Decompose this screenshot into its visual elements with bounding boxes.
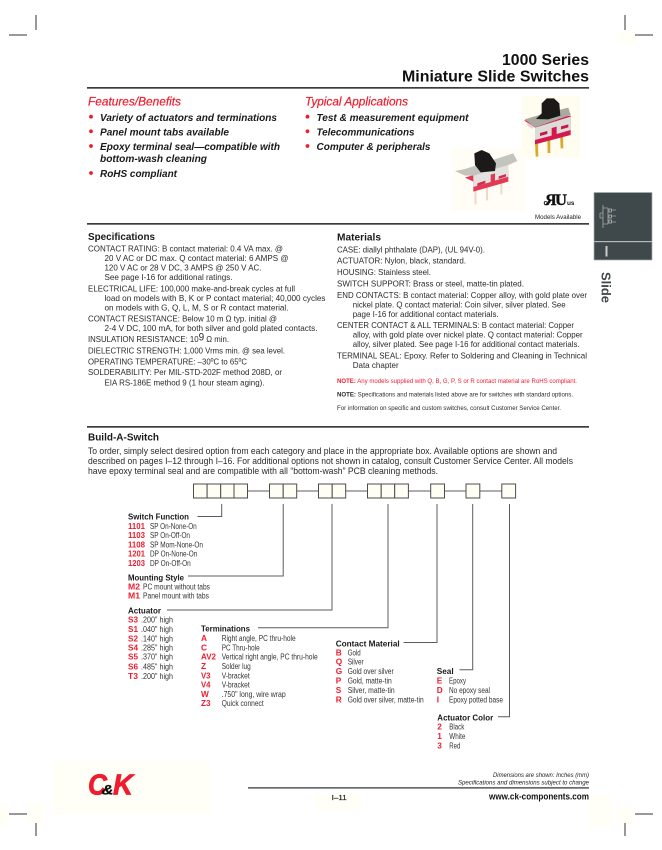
option list: terminations: Quick connect: [222, 699, 264, 708]
option list: seal: No epoxy seal: [449, 686, 490, 695]
option list: actuator: S5: [128, 652, 138, 662]
option list: actuator: S6: [128, 661, 138, 671]
option list: mounting style: Panel mount with tabs: [143, 592, 209, 601]
option list: actuator: .040" high: [141, 625, 173, 634]
heading: build-a-switch: Build-A-Switch: [88, 432, 159, 444]
footer note: dimensions: Dimensions are shown: Inches (mm): [493, 772, 589, 779]
specifications text: CONTACT RESISTANCE: Below 10 m Ω typ. initial @: [88, 313, 277, 323]
option list: actuator: Actuator: [128, 606, 162, 616]
specifications text: OPERATING TEMPERATURE: –30ºC to 65ºC: [88, 357, 247, 367]
option list: terminations: AV2: [201, 651, 216, 661]
specifications text: SOLDERABILITY: Per MIL-STD-202F method 208D, or: [88, 367, 282, 377]
specifications text: 2-4 V DC, 100 mA, for both silver and gold plated contacts.: [104, 323, 318, 333]
logo: C&K: K: [113, 770, 135, 802]
option list: actuator color: Black: [449, 722, 465, 731]
option list: actuator: T3: [128, 671, 138, 681]
option list: switch function: DP On-Off-On: [150, 559, 191, 568]
title: Miniature Slide Switches: [402, 68, 589, 86]
option list: terminations: Z: [201, 661, 206, 671]
option list: actuator: .285" high: [141, 643, 173, 652]
option list: terminations: W: [201, 689, 209, 699]
website: www.ck-components.com: [488, 792, 589, 802]
option list: terminations: V-bracket: [222, 681, 250, 690]
option list: mounting style: M2: [128, 581, 140, 591]
features list: [89, 112, 280, 180]
specifications text: [88, 244, 326, 388]
notes: [337, 378, 577, 412]
option list: actuator color: Actuator Color: [437, 712, 494, 722]
icon: UL recognized mark: c: [544, 200, 548, 207]
option list: switch function: DP On-None-On: [150, 550, 197, 559]
option list: switch function: SP Mom-None-On: [150, 540, 203, 549]
side tab: [594, 192, 652, 260]
option list: terminations: A: [201, 633, 207, 643]
photo: upright slide switch: [522, 96, 580, 158]
option list: terminations: Vertical right angle, PC thru-hole: [222, 652, 318, 661]
models available caption: Models Available: [535, 214, 581, 221]
option list: contact material: B: [336, 647, 342, 657]
materials text: alloy, silver plated. See page I-16 for additional contact materials.: [353, 339, 580, 349]
applications list: Computer & peripherals: [316, 141, 431, 153]
logo: C&K: &: [102, 782, 114, 798]
icon: UL recognized mark: us: [567, 200, 575, 207]
option list: seal: Seal: [437, 666, 454, 676]
page number: I–11: [332, 793, 347, 802]
icon: switch schematic: [600, 205, 616, 228]
applications list: Test & measurement equipment: [316, 112, 469, 124]
option list: actuator: S2: [128, 633, 138, 643]
option list: actuator: [128, 606, 173, 681]
option list: terminations: C: [201, 642, 207, 652]
materials text: HOUSING: Stainless steel.: [337, 267, 431, 277]
materials text: nickel plate. Q contact material: Coin silver, silver plated. See: [353, 300, 566, 310]
panel: typical applications: [305, 96, 469, 153]
option list: contact material: P: [336, 676, 342, 686]
option list: switch function: Switch Function: [128, 512, 189, 522]
applications list: Telecommunications: [316, 126, 415, 138]
heading: materials: Materials: [337, 232, 381, 244]
heading: features: Features/Benefits: [88, 96, 181, 108]
heading: applications: Typical Applications: [305, 96, 408, 108]
option list: contact material: Contact Material: [336, 638, 400, 648]
materials text: alloy, with gold plate over nickel plate. Q contact material: Copper: [353, 330, 583, 340]
option list: actuator color: [437, 712, 494, 751]
materials text: TERMINAL SEAL: Epoxy. Refer to Soldering and Cleaning in Technical: [337, 350, 587, 360]
section letter I: [606, 246, 608, 256]
photo: panel mount slide switch: [453, 148, 525, 211]
option list: contact material: Gold over silver: [348, 667, 394, 676]
applications list: [306, 112, 469, 153]
materials text: ACTUATOR: Nylon, black, standard.: [337, 256, 466, 266]
footer: [248, 772, 589, 802]
option list: mounting style: Mounting Style: [128, 572, 184, 582]
option list: switch function: 1203: [128, 558, 145, 568]
option list: terminations: PC Thru-hole: [222, 643, 260, 652]
footer note: dimensions: [458, 772, 589, 786]
option list: contact material: Silver: [348, 658, 364, 667]
intro paragraph: described on pages I–12 through I–16. For additional options not shown in catalog, consult Customer Service Center. All models: [88, 455, 573, 466]
option list: seal: D: [437, 685, 443, 695]
option list: terminations: Solder lug: [222, 662, 251, 671]
title: 1000 Series: [502, 52, 589, 69]
option list: switch function: 1103: [128, 530, 145, 540]
option list: contact material: G: [336, 666, 342, 676]
option list: mounting style: PC mount without tabs: [143, 582, 210, 591]
option boxes: [194, 484, 516, 498]
option list: actuator color: White: [449, 732, 466, 741]
connector lines: [167, 504, 510, 717]
option list: contact material: Gold over silver, matte-tin: [348, 695, 424, 704]
materials text: SWITCH SUPPORT: Brass or steel, matte-tin plated.: [337, 278, 524, 288]
panel: build-a-switch: [88, 432, 573, 751]
option list: terminations: V-bracket: [222, 671, 250, 680]
option list: actuator: .485" high: [141, 662, 173, 671]
option list: actuator color: 3: [437, 741, 442, 751]
option list: seal: Epoxy: [449, 677, 466, 686]
notes: NOTE: Any models supplied with Q, B, G, P, S or R contact material are RoHS compliant.: [337, 378, 577, 385]
features list: RoHS compliant: [100, 168, 177, 180]
panel: materials: [337, 232, 587, 412]
specifications text: load on models with B, K or P contact material; 40,000 cycles: [104, 293, 326, 303]
specifications text: 20 V AC or DC max. Q contact material: 6 AMPS @: [104, 253, 288, 263]
option list: contact material: Q: [336, 657, 343, 667]
panel: features and benefits: [88, 96, 280, 180]
option list: actuator: .370" high: [141, 653, 173, 662]
intro paragraph: have epoxy terminal seal and are compatible with all “bottom-wash” PCB cleaning methods.: [88, 465, 438, 476]
features list: bottom-wash cleaning: [100, 153, 208, 165]
option list: actuator color: Red: [449, 742, 460, 751]
features list: Epoxy terminal seal—compatible with: [100, 141, 280, 153]
option list: actuator: .140" high: [141, 634, 173, 643]
option list: terminations: [201, 624, 318, 708]
option list: actuator color: 2: [437, 721, 442, 731]
specifications text: CONTACT RATING: B contact material: 0.4 VA max. @: [88, 244, 283, 254]
specifications text: EIA RS-186E method 9 (1 hour steam aging).: [104, 378, 264, 388]
specifications text: on models with G, Q, L, M, S or R contact material.: [104, 302, 288, 312]
specifications text: See page I-16 for additional ratings.: [104, 272, 232, 282]
option list: switch function: [128, 512, 203, 568]
option list: switch function: 1108: [128, 539, 145, 549]
option list: actuator: S4: [128, 642, 138, 652]
option list: actuator: .200" high: [141, 616, 173, 625]
option list: seal: Epoxy potted base: [449, 695, 503, 704]
logo: C&K: [88, 770, 135, 802]
option list: seal: I: [437, 694, 439, 704]
icon: UL recognized mark: R: [545, 192, 556, 209]
materials text: Data chapter: [353, 360, 399, 370]
materials text: CENTER CONTACT & ALL TERMINALS: B contact material: Copper: [337, 320, 574, 330]
option list: mounting style: M1: [128, 591, 140, 601]
option list: contact material: [336, 638, 424, 704]
option list: terminations: Terminations: [201, 624, 250, 634]
option list: terminations: Right angle, PC thru-hole: [222, 634, 296, 643]
specifications text: ELECTRICAL LIFE: 100,000 make-and-break cycles at full: [88, 284, 295, 294]
option list: contact material: Gold: [348, 648, 361, 657]
option list: contact material: R: [336, 694, 342, 704]
footer note: dimensions: Specifications and dimensions subject to change: [458, 780, 589, 786]
option list: actuator: S3: [128, 615, 138, 625]
intro paragraph: [88, 445, 573, 476]
option list: terminations: V4: [201, 680, 211, 690]
option list: terminations: .750" long, wire wrap: [222, 690, 286, 699]
option list: switch function: 1101: [128, 521, 145, 531]
option list: terminations: V3: [201, 670, 211, 680]
notes: NOTE: Specifications and materials listed above are for switches with standard options.: [337, 391, 573, 398]
notes: For information on specific and custom switches, consult Customer Service Center.: [337, 405, 561, 412]
option list: contact material: Silver, matte-tin: [348, 686, 395, 695]
option list: actuator: S1: [128, 624, 138, 634]
option list: contact material: Gold, matte-tin: [348, 677, 392, 686]
specifications text: 9: [199, 331, 204, 343]
option list: seal: [437, 666, 503, 704]
specifications text: 120 V AC or 28 V DC, 3 AMPS @ 250 V AC.: [104, 262, 262, 272]
materials text: END CONTACTS: B contact material: Copper alloy, with gold plate over: [337, 290, 587, 300]
icon: UL recognized mark: U: [555, 192, 567, 209]
materials text: page I-16 for additional contact materials.: [353, 309, 499, 319]
features list: Panel mount tabs available: [100, 126, 229, 138]
icon: UL recognized mark: [544, 192, 575, 209]
specifications text: DIELECTRIC STRENGTH: 1,000 Vrms min. @ sea level.: [88, 346, 285, 356]
logo: C&K: C: [88, 770, 108, 802]
heading: specifications: Specifications: [88, 231, 155, 243]
specifications text: Ω min.: [204, 334, 229, 344]
materials text: [337, 244, 587, 370]
option list: actuator: .200" high: [141, 672, 173, 681]
specifications text: INSULATION RESISTANCE: 10: [88, 334, 210, 344]
features list: Variety of actuators and terminations: [100, 112, 277, 124]
option list: switch function: SP On-None-On: [150, 522, 197, 531]
option list: terminations: Z3: [201, 698, 211, 708]
option list: seal: E: [437, 676, 443, 686]
option list: contact material: S: [336, 685, 342, 695]
title: [402, 52, 589, 86]
option list: switch function: 1201: [128, 549, 145, 559]
panel: specifications: [88, 231, 326, 388]
materials text: CASE: diallyl phthalate (DAP), (UL 94V-0).: [337, 244, 485, 254]
intro paragraph: To order, simply select desired option from each category and place in the appropriate box. Available options are shown and: [88, 445, 557, 456]
option list: actuator color: 1: [437, 731, 442, 741]
option list: mounting style: [128, 572, 210, 601]
side label: Slide: Slide: [598, 272, 614, 303]
option list: switch function: SP On-Off-On: [150, 531, 190, 540]
